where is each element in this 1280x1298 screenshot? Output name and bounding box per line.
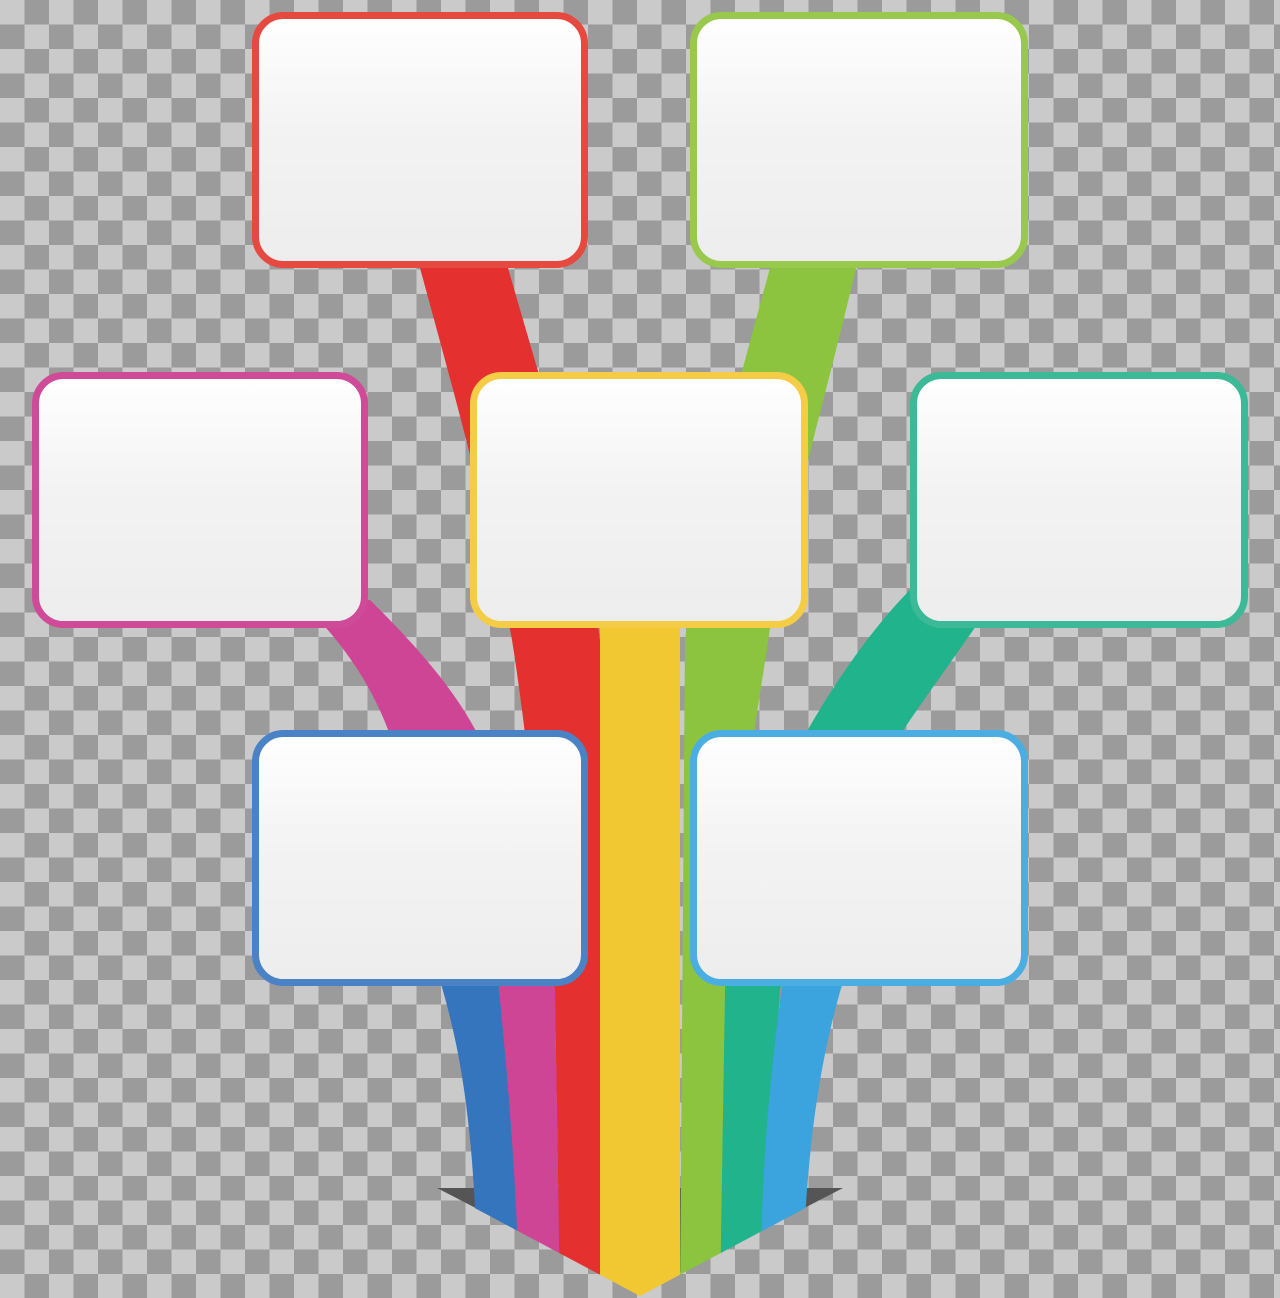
box: light blue bottom-right xyxy=(694,734,1024,982)
ribbon: green xyxy=(680,268,856,1298)
box: pink middle-left xyxy=(36,376,364,624)
ribbon: red xyxy=(420,268,600,1298)
box: teal middle-right xyxy=(914,376,1244,624)
ribbon: light blue xyxy=(762,986,842,1232)
ribbon: pink xyxy=(326,600,560,1253)
ribbon: blue xyxy=(442,986,518,1231)
box: green top-right xyxy=(694,16,1024,264)
box: blue bottom-left xyxy=(256,734,584,982)
ribbons xyxy=(300,268,980,1298)
box: yellow center xyxy=(474,376,804,624)
box: red top-left xyxy=(256,16,584,264)
ribbon: teal xyxy=(720,590,980,1298)
ribbon: yellow xyxy=(600,620,680,1298)
arrow head shadow xyxy=(437,1188,843,1293)
